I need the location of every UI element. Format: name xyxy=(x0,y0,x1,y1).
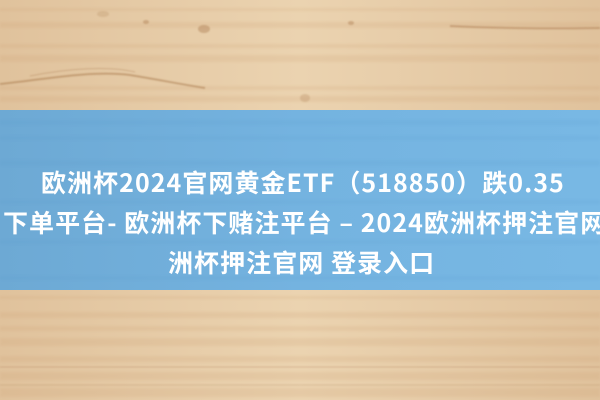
title text xyxy=(3,164,600,280)
title line 1: 欧洲杯2024官网黄金ETF（518850）跌0.35 xyxy=(41,164,565,200)
title line 3: 洲杯押注官网 登录入口 xyxy=(168,244,435,280)
title line 2: 下单平台- 欧洲杯下赌注平台 – 2024欧洲杯押注官网 xyxy=(3,204,600,240)
